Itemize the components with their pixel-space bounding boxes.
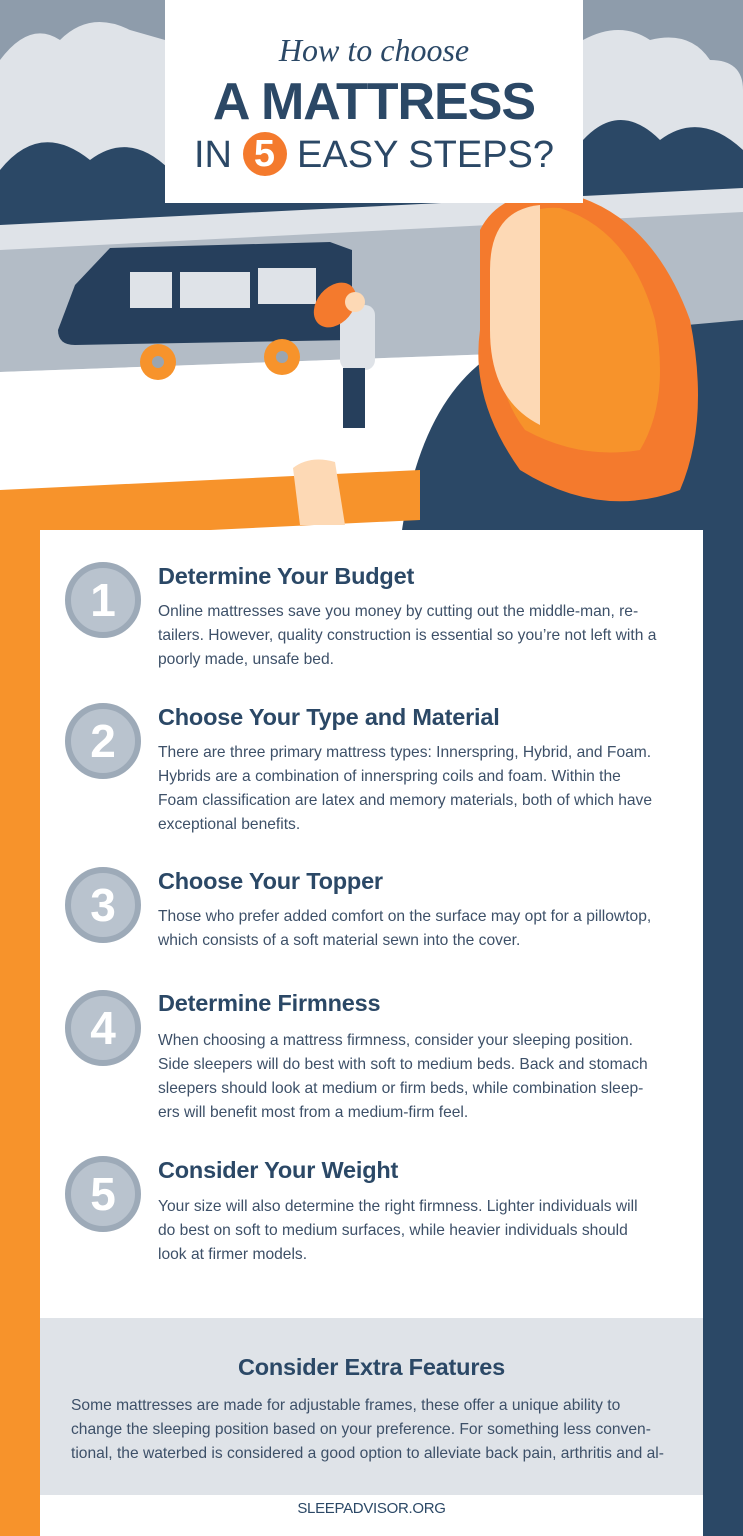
title box bbox=[165, 0, 583, 203]
step 4: 4 bbox=[90, 1002, 116, 1054]
step 1: poorly made, unsafe bed. bbox=[158, 651, 334, 668]
bench bbox=[0, 470, 420, 540]
step 4: sleepers should look at medium or firm beds, while combination sleep- bbox=[158, 1080, 643, 1097]
step 5: look at firmer models. bbox=[158, 1246, 307, 1263]
step 2 bbox=[65, 703, 652, 833]
step 4: ers will benefit most from a medium-firm feel. bbox=[158, 1104, 468, 1121]
woman bbox=[400, 192, 743, 545]
step 2: Hybrids are a combination of innerspring coils and foam. Within the bbox=[158, 768, 621, 785]
step 2: There are three primary mattress types: Innerspring, Hybrid, and Foam. bbox=[158, 744, 651, 761]
step 4: When choosing a mattress firmness, consider your sleeping position. bbox=[158, 1032, 633, 1049]
step 3: Choose Your Topper bbox=[158, 868, 383, 894]
man with rolled mattress bbox=[305, 274, 375, 428]
step 2: 2 bbox=[90, 715, 116, 767]
step 1: 1 bbox=[90, 574, 116, 626]
step 1: Online mattresses save you money by cutting out the middle-man, re- bbox=[158, 603, 638, 620]
step 5 bbox=[65, 1156, 638, 1263]
step 4 bbox=[65, 990, 648, 1121]
step 4: Determine Firmness bbox=[158, 990, 380, 1016]
step 2: Foam classification are latex and memory materials, both of which have bbox=[158, 792, 652, 809]
step 1: tailers. However, quality construction is essential so you’re not left with a bbox=[158, 627, 656, 644]
step 2: exceptional benefits. bbox=[158, 816, 300, 833]
illustration: header scene bbox=[0, 0, 743, 545]
text: extra features: tional, the waterbed is considered a good option to alleviate back pain, arthritis and al- bbox=[71, 1445, 664, 1462]
step 1: Determine Your Budget bbox=[158, 563, 414, 589]
step 3: 3 bbox=[90, 879, 116, 931]
heading: extra features: Consider Extra Features bbox=[238, 1354, 505, 1380]
step 3 bbox=[65, 867, 651, 949]
van bbox=[58, 242, 352, 380]
main white card bbox=[40, 530, 703, 1536]
title box: 5 bbox=[254, 133, 275, 175]
text: extra features: Some mattresses are made for adjustable frames, these offer a unique ability to bbox=[71, 1397, 620, 1414]
side strips bbox=[0, 545, 40, 1536]
step 5: Consider Your Weight bbox=[158, 1157, 398, 1183]
title box: A MATTRESS bbox=[213, 73, 535, 131]
footer: source: SLEEPADVISOR.ORG bbox=[297, 1500, 446, 1517]
step 3: Those who prefer added comfort on the surface may opt for a pillowtop, bbox=[158, 908, 651, 925]
step 3: which consists of a soft material sewn into the cover. bbox=[158, 932, 520, 949]
text: extra features: change the sleeping position based on your preference. For something less conven- bbox=[71, 1421, 651, 1438]
panel: extra features bbox=[40, 1318, 703, 1495]
text: extra features bbox=[71, 1397, 664, 1462]
step 5: Your size will also determine the right firmness. Lighter individuals will bbox=[158, 1198, 638, 1215]
step 5: 5 bbox=[90, 1168, 116, 1220]
step 2: Choose Your Type and Material bbox=[158, 704, 500, 730]
title box: How to choose bbox=[279, 32, 469, 68]
step 4: Side sleepers will do best with soft to medium beds. Back and stomach bbox=[158, 1056, 648, 1073]
step 1 bbox=[65, 562, 656, 668]
title box: IN EASY STEPS? bbox=[194, 134, 554, 176]
step 5: do best on soft to medium surfaces, while heavier individuals should bbox=[158, 1222, 628, 1239]
